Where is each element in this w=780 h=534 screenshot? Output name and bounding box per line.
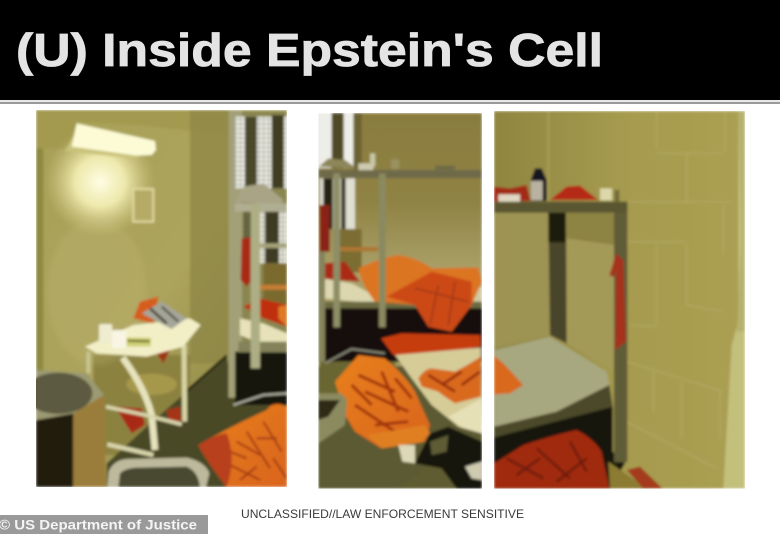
orange cloth on mattress bbox=[494, 356, 523, 394]
back upright bbox=[548, 212, 567, 343]
ceiling light bbox=[65, 123, 156, 158]
panel: photo of bunk bed with orange clothes bbox=[318, 113, 482, 489]
steel sink bbox=[36, 368, 106, 487]
classification caption: UNCLASSIFIED//LAW ENFORCEMENT SENSITIVE bbox=[241, 508, 524, 521]
lower mattress bbox=[395, 348, 482, 433]
items on shelf bbox=[494, 168, 619, 202]
bunk posts bbox=[333, 173, 340, 327]
bright wall edge bbox=[723, 111, 745, 489]
front upright bbox=[614, 202, 627, 462]
bed rail bbox=[494, 385, 613, 437]
barred window bbox=[318, 113, 362, 272]
clothes on desk bbox=[133, 297, 187, 329]
block lines bbox=[548, 111, 730, 468]
upper mattress bbox=[322, 278, 377, 303]
bedding and cloth on upper bunk bbox=[235, 183, 283, 205]
shelf bbox=[494, 202, 627, 213]
toilet rim bbox=[107, 458, 209, 487]
red cloth under bunk bbox=[494, 430, 609, 489]
dark space under the bunk bbox=[235, 352, 287, 405]
lower floor bbox=[318, 486, 319, 488]
lower bunk mattress bbox=[243, 298, 287, 327]
cell door with grating bbox=[228, 111, 287, 398]
black shoes and cables bbox=[398, 427, 482, 489]
shelf with small items bbox=[318, 153, 482, 178]
panel: photo of cell with light, desk and sink bbox=[24, 110, 287, 487]
desk bbox=[85, 318, 201, 455]
orange jumpsuit heap bbox=[198, 404, 287, 487]
orange cloth under desk bbox=[115, 407, 145, 433]
title bar bbox=[0, 0, 780, 104]
cardboard box bbox=[608, 462, 647, 489]
steel sink edge bbox=[318, 393, 347, 443]
orange clothes on mattress bbox=[418, 357, 481, 403]
copyright credit: © US Department of Justice bbox=[0, 516, 197, 532]
red cloth on lower bunk bbox=[381, 333, 481, 355]
bunk post bbox=[251, 204, 260, 368]
red hanging cloth bbox=[320, 205, 330, 252]
mattress bbox=[495, 337, 609, 427]
cups and papers bbox=[99, 324, 151, 348]
orange bedding bbox=[358, 255, 482, 332]
red hanging cloth bbox=[241, 237, 253, 287]
dark under bunk bbox=[494, 407, 625, 489]
wall vent bbox=[133, 189, 153, 222]
red strap bbox=[609, 253, 626, 350]
floor bbox=[107, 357, 287, 487]
title: (U) Inside Epstein's Cell bbox=[16, 24, 603, 76]
panel: photo of bunk against block wall bbox=[494, 111, 745, 489]
orange jumpsuit heap bbox=[335, 355, 430, 448]
dark under bunk bbox=[324, 308, 482, 362]
